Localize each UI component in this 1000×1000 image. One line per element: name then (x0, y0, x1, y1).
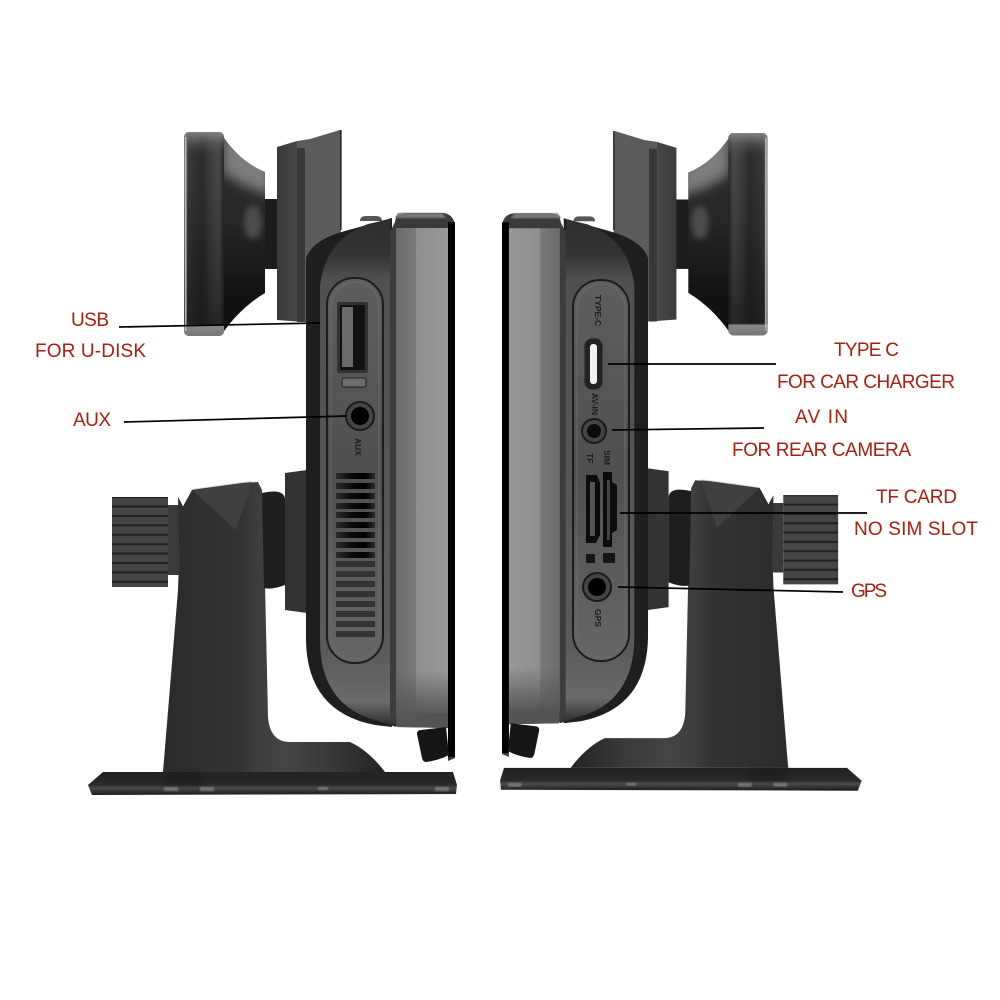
infographic: device ports diagram (36, 130, 978, 795)
AV-IN label: AV-IN (590, 393, 600, 415)
icons: card slots (586, 553, 615, 563)
right port panel (573, 280, 629, 661)
label: GPS: GPS (851, 581, 887, 602)
icon: battery (342, 378, 366, 387)
label: FOR CAR CHARGER: FOR CAR CHARGER (777, 372, 955, 393)
USB port (337, 302, 368, 373)
AV jack (582, 419, 606, 443)
GPS jack (583, 573, 611, 601)
SIM slot (603, 472, 617, 547)
vent slats (336, 473, 375, 637)
AUX label: AUX (353, 438, 363, 456)
TYPE-C label: TYPE-C (593, 295, 603, 326)
right device (500, 126, 862, 791)
label: NO SIM SLOT: NO SIM SLOT (854, 519, 978, 540)
SIM label: SIM (602, 450, 612, 465)
GPS label: GPS (593, 609, 603, 627)
label: TF CARD: TF CARD (876, 487, 957, 508)
leader lines (119, 323, 867, 592)
label: FOR REAR CAMERA: FOR REAR CAMERA (732, 440, 911, 461)
AUX jack (346, 402, 374, 430)
label: AV IN: AV IN (795, 407, 848, 428)
label: FOR U-DISK: FOR U-DISK (35, 341, 146, 362)
label: AUX: AUX (73, 410, 111, 431)
left device (88, 125, 457, 795)
left port panel (327, 278, 383, 663)
label: TYPE C: TYPE C (834, 340, 899, 361)
TF slot (586, 475, 600, 543)
TF label: TF (585, 453, 595, 463)
label: USB: USB (71, 310, 109, 331)
USB-C port (584, 338, 603, 390)
